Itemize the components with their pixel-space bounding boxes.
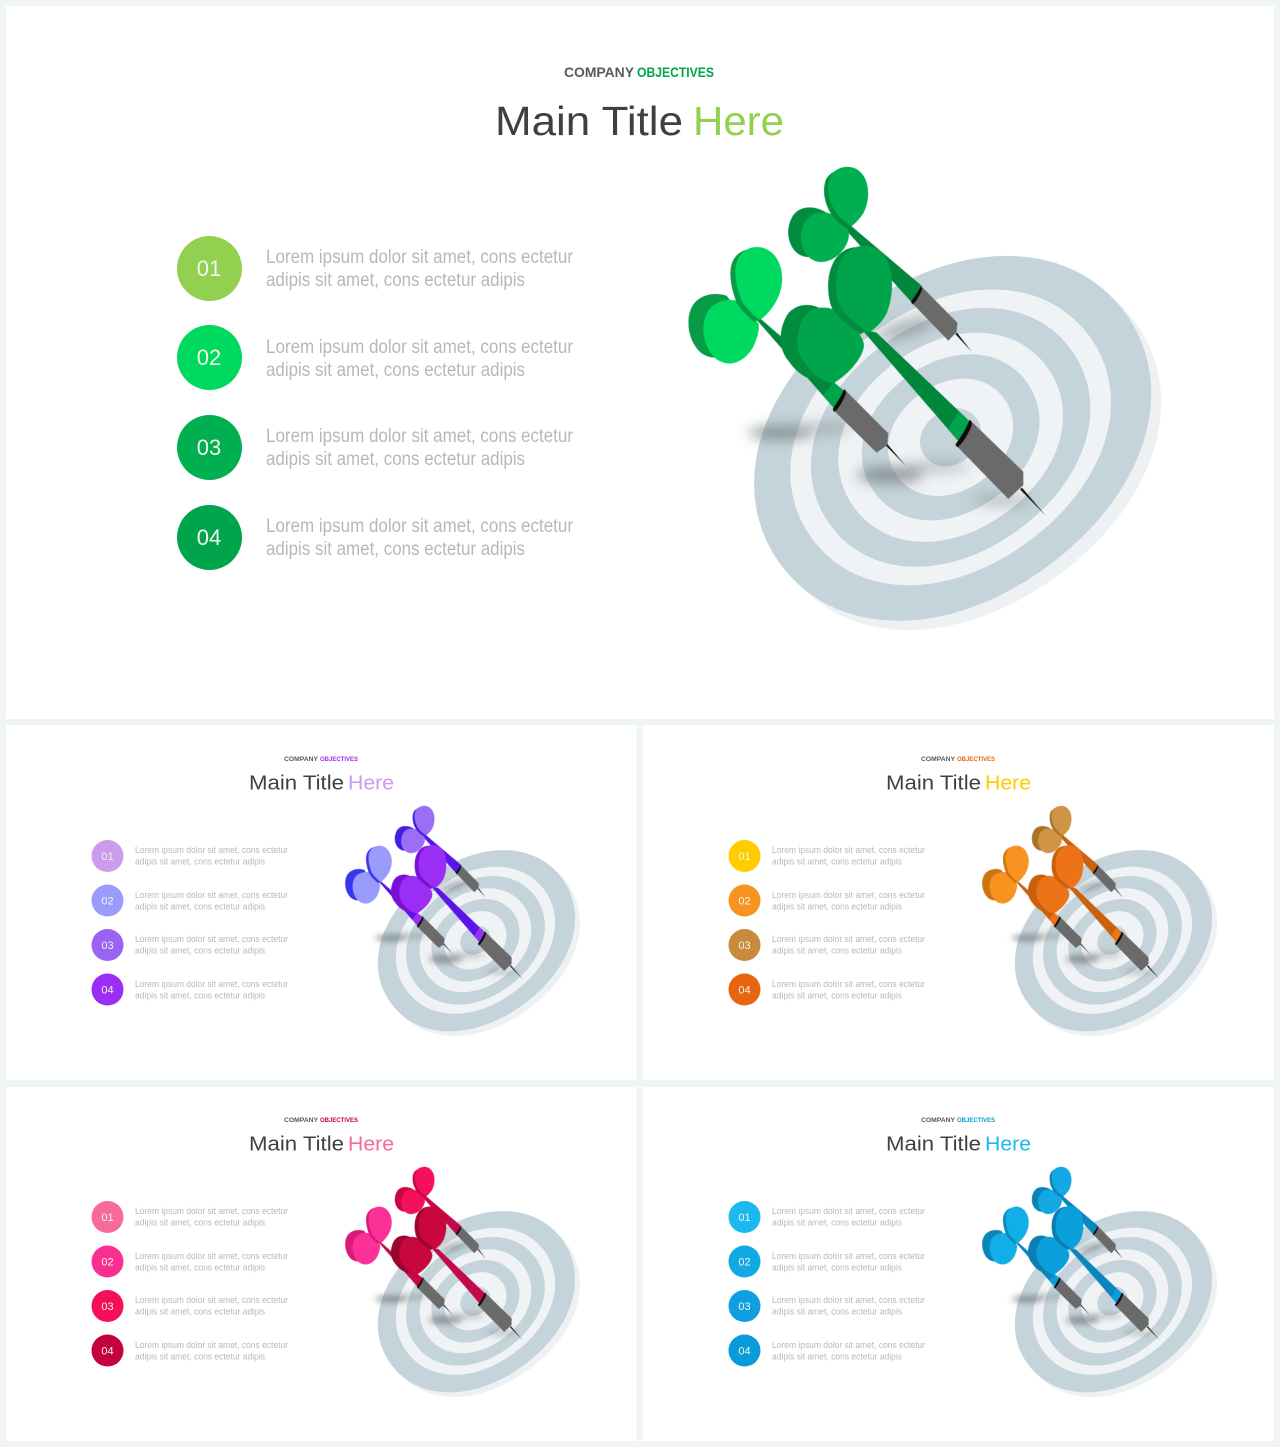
- list items: adipis sit amet, cons ectetur adipis: [772, 902, 902, 912]
- list items: adipis sit amet, cons ectetur adipis: [135, 990, 265, 1000]
- label: company objectives: COMPANY: [564, 64, 635, 80]
- title: Here: [985, 772, 1031, 794]
- list item 03: 03: [197, 435, 221, 460]
- list items: adipis sit amet, cons ectetur adipis: [135, 902, 265, 912]
- list items: 03: [738, 1301, 751, 1313]
- title: Main Title: [249, 772, 344, 794]
- list items: [728, 1201, 925, 1366]
- label: company objectives: OBJECTIVES: [637, 64, 714, 80]
- list items: Lorem ipsum dolor sit amet, cons ectetur: [772, 1340, 925, 1350]
- label: company objectives: [921, 756, 995, 763]
- title: Here: [985, 1132, 1031, 1156]
- list item 04: Lorem ipsum dolor sit amet, cons ectetur: [266, 516, 574, 537]
- list items: Lorem ipsum dolor sit amet, cons ectetur: [135, 1206, 288, 1216]
- list items: 04: [738, 984, 751, 996]
- list item 04: 04: [197, 525, 221, 550]
- title: Main Title: [249, 1132, 344, 1156]
- list items: 04: [101, 984, 114, 996]
- panel: blue slide: [643, 1087, 1274, 1441]
- list items: adipis sit amet, cons ectetur adipis: [135, 1352, 265, 1362]
- list items: 02: [101, 1256, 114, 1268]
- list item 02: [177, 325, 574, 390]
- title: [249, 772, 394, 794]
- panel: purple slide: [6, 725, 636, 1080]
- list items: Lorem ipsum dolor sit amet, cons ectetur: [135, 934, 288, 944]
- list items: [92, 840, 288, 1006]
- label: company objectives: [284, 1117, 358, 1124]
- illustration: dartboard with pink darts: [344, 1167, 614, 1433]
- list items: Lorem ipsum dolor sit amet, cons ectetur: [135, 845, 288, 855]
- list items: [92, 1201, 288, 1366]
- list item 02: Lorem ipsum dolor sit amet, cons ectetur: [266, 337, 574, 358]
- list items: Lorem ipsum dolor sit amet, cons ectetur: [135, 890, 288, 900]
- list items: 01: [738, 1212, 751, 1224]
- list items: 03: [738, 940, 751, 952]
- title: Here: [693, 98, 784, 144]
- list item 01: adipis sit amet, cons ectetur adipis: [266, 270, 525, 291]
- label: company objectives: COMPANY: [284, 756, 318, 763]
- list items: Lorem ipsum dolor sit amet, cons ectetur: [772, 845, 925, 855]
- label: company objectives: COMPANY: [921, 756, 955, 763]
- list items: 01: [738, 851, 751, 863]
- title: Main Title: [886, 772, 981, 794]
- list items: [728, 840, 925, 1006]
- list item 01: Lorem ipsum dolor sit amet, cons ectetur: [266, 247, 574, 268]
- label: company objectives: [284, 756, 358, 763]
- label: company objectives: OBJECTIVES: [957, 1117, 995, 1124]
- illustration: dartboard with orange darts: [981, 806, 1251, 1072]
- title: [495, 98, 784, 144]
- list item 03: Lorem ipsum dolor sit amet, cons ectetur: [266, 426, 574, 447]
- list items: adipis sit amet, cons ectetur adipis: [772, 856, 902, 866]
- list items: adipis sit amet, cons ectetur adipis: [772, 1352, 902, 1362]
- title: Main Title: [495, 98, 683, 144]
- list items: adipis sit amet, cons ectetur adipis: [772, 1306, 902, 1316]
- list items: Lorem ipsum dolor sit amet, cons ectetur: [135, 1251, 288, 1261]
- panel: pink slide: [6, 1087, 636, 1441]
- label: company objectives: OBJECTIVES: [957, 756, 995, 763]
- list items: 01: [101, 851, 114, 863]
- label: company objectives: COMPANY: [921, 1117, 955, 1124]
- title: [249, 1132, 394, 1156]
- title: [886, 1132, 1031, 1156]
- list items: Lorem ipsum dolor sit amet, cons ectetur: [772, 1251, 925, 1261]
- list items: 03: [101, 940, 114, 952]
- illustration: dartboard with blue darts: [981, 1167, 1251, 1433]
- list items: adipis sit amet, cons ectetur adipis: [135, 856, 265, 866]
- list items: adipis sit amet, cons ectetur adipis: [135, 946, 265, 956]
- list items: adipis sit amet, cons ectetur adipis: [135, 1306, 265, 1316]
- list items: 03: [101, 1301, 114, 1313]
- list items: adipis sit amet, cons ectetur adipis: [772, 990, 902, 1000]
- list item 01: [177, 236, 574, 301]
- list items: Lorem ipsum dolor sit amet, cons ectetur: [135, 979, 288, 989]
- list items: adipis sit amet, cons ectetur adipis: [772, 946, 902, 956]
- list items: Lorem ipsum dolor sit amet, cons ectetur: [772, 890, 925, 900]
- list items: adipis sit amet, cons ectetur adipis: [135, 1262, 265, 1272]
- list items: 02: [738, 1256, 751, 1268]
- list items: 02: [738, 896, 751, 908]
- illustration: dartboard with purple darts: [344, 806, 614, 1072]
- list items: Lorem ipsum dolor sit amet, cons ectetur: [772, 1295, 925, 1305]
- list items: Lorem ipsum dolor sit amet, cons ectetur: [772, 1206, 925, 1216]
- label: company objectives: [921, 1117, 995, 1124]
- list items: 04: [101, 1346, 114, 1358]
- list item 03: adipis sit amet, cons ectetur adipis: [266, 449, 525, 470]
- list item 03: [177, 415, 574, 480]
- list items: Lorem ipsum dolor sit amet, cons ectetur: [135, 1340, 288, 1350]
- list items: Lorem ipsum dolor sit amet, cons ectetur: [135, 1295, 288, 1305]
- title: Here: [348, 1132, 394, 1156]
- list items: Lorem ipsum dolor sit amet, cons ectetur: [772, 979, 925, 989]
- list items: adipis sit amet, cons ectetur adipis: [772, 1218, 902, 1228]
- list items: Lorem ipsum dolor sit amet, cons ectetur: [772, 934, 925, 944]
- list item 04: adipis sit amet, cons ectetur adipis: [266, 539, 525, 560]
- list items: 02: [101, 896, 114, 908]
- panel: orange slide: [643, 725, 1274, 1080]
- label: company objectives: OBJECTIVES: [320, 1117, 358, 1124]
- list items: adipis sit amet, cons ectetur adipis: [135, 1218, 265, 1228]
- title: [886, 772, 1031, 794]
- list item 02: adipis sit amet, cons ectetur adipis: [266, 360, 525, 381]
- label: company objectives: [564, 64, 714, 80]
- label: company objectives: COMPANY: [284, 1117, 318, 1124]
- list items: 01: [101, 1212, 114, 1224]
- list item 04: [177, 505, 574, 570]
- list item 02: 02: [197, 345, 221, 370]
- label: company objectives: OBJECTIVES: [320, 756, 358, 763]
- title: Main Title: [886, 1132, 981, 1156]
- title: Here: [348, 772, 394, 794]
- panel: main green slide: [6, 6, 1274, 719]
- list items: adipis sit amet, cons ectetur adipis: [772, 1262, 902, 1272]
- list items: 04: [738, 1346, 751, 1358]
- list item 01: 01: [197, 256, 221, 281]
- illustration: dartboard with three green darts: [686, 167, 1229, 702]
